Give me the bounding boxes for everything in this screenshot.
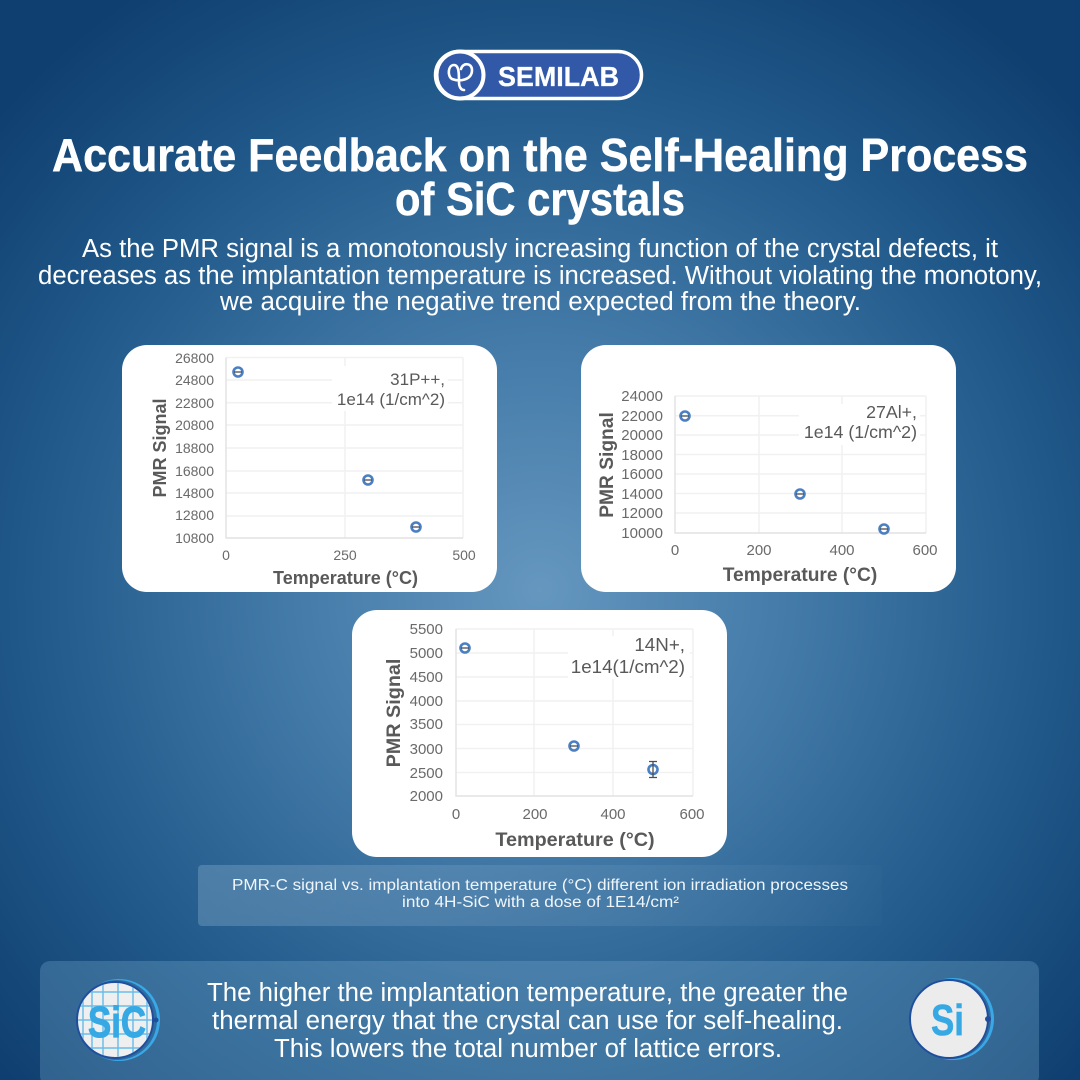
chart 2 x axis labels: 400 (829, 542, 855, 559)
chart 3 points (460, 644, 658, 778)
chart 2 y axis labels: 20000 (621, 427, 663, 444)
caption: into 4H-SiC with a dose of 1E14/cm² (402, 894, 679, 911)
chart 3 y axis labels: 5500 (410, 621, 443, 638)
chart 1 grid (226, 358, 463, 538)
chart 1 y axis labels: 24800 (175, 372, 214, 388)
chart 3 axis titles: PMR Signal (383, 659, 405, 767)
chart 2 grid (675, 396, 926, 533)
annotation background (568, 636, 690, 679)
chart 2 x axis labels: 200 (746, 542, 772, 559)
chart 2 y axis labels: 22000 (621, 408, 663, 425)
chart 2 x axis labels: 600 (912, 542, 938, 559)
chart 2 x axis labels (671, 542, 938, 559)
chart 1 annotation (337, 370, 445, 409)
panel: chart 14N+ (352, 610, 727, 857)
conclusion text: This lowers the total number of lattice errors. (274, 1035, 782, 1063)
chart 1 annotation: 31P++, (390, 370, 445, 389)
intro text: we acquire the negative trend expected from the theory. (219, 288, 861, 316)
chart 1 axis titles: PMR Signal (150, 398, 170, 498)
chart 3 x axis labels: 600 (679, 806, 705, 823)
title: of SiC crystals (395, 173, 685, 225)
chart 3 y axis labels (410, 621, 443, 805)
icon: SiC wafer (76, 979, 160, 1061)
chart 1 y axis labels: 20800 (175, 417, 214, 433)
title (52, 129, 1028, 225)
chart 2 y axis labels: 14000 (621, 486, 663, 503)
chart 3 grid (456, 629, 693, 796)
panel: conclusion (40, 961, 1039, 1080)
chart 1 axis titles (150, 398, 418, 588)
chart 1 y axis labels: 26800 (175, 350, 214, 366)
panel: chart 31P++ (122, 345, 497, 592)
intro text: As the PMR signal is a monotonously increasing function of the crystal defects, it (82, 235, 998, 263)
intro text: decreases as the implantation temperature is increased. Without violating the monotony, (38, 262, 1042, 290)
chart 2 y axis labels: 10000 (621, 525, 663, 542)
panel: chart 27Al+ (581, 345, 956, 592)
intro text (38, 235, 1042, 316)
chart 3 annotation (571, 634, 685, 677)
chart 2 x axis labels: 0 (671, 542, 679, 559)
chart 1 x axis labels: 500 (452, 547, 476, 563)
annotation background (799, 404, 920, 445)
conclusion text (207, 979, 848, 1063)
chart 1 y axis labels (175, 350, 214, 546)
chart 1 axis titles: Temperature (°C) (273, 568, 418, 588)
chart 1 x axis labels: 0 (222, 547, 230, 563)
chart 3 x axis labels: 200 (522, 806, 548, 823)
annotation background (332, 366, 448, 411)
chart 3 x axis labels: 400 (600, 806, 626, 823)
chart 1 y axis labels: 22800 (175, 395, 214, 411)
chart 2 annotation: 1e14 (1/cm^2) (804, 422, 917, 442)
chart 1 y axis labels: 16800 (175, 463, 214, 479)
logo: Semilab: SEMILAB (498, 61, 619, 92)
chart 1 points (234, 368, 420, 532)
chart 3 y axis labels: 2000 (410, 788, 443, 805)
chart 2 axis titles: Temperature (°C) (723, 565, 877, 586)
chart 1 x axis labels: 250 (333, 547, 357, 563)
chart 2 y axis labels (621, 388, 663, 542)
chart 1 y axis labels: 18800 (175, 440, 214, 456)
icon: Si wafer (910, 978, 994, 1060)
chart 3 y axis labels: 2500 (410, 765, 443, 782)
chart 3 y axis labels: 3000 (410, 741, 443, 758)
chart 2 y axis labels: 16000 (621, 466, 663, 483)
chart 1 annotation: 1e14 (1/cm^2) (337, 390, 445, 409)
chart 3 y axis labels: 4500 (410, 669, 443, 686)
conclusion text: The higher the implantation temperature, the greater the (207, 979, 848, 1007)
chart 3 x axis labels (452, 806, 705, 823)
chart 3 annotation: 1e14(1/cm^2) (571, 656, 685, 677)
chart 3 axis titles: Temperature (°C) (495, 829, 655, 851)
chart 2 y axis labels: 12000 (621, 505, 663, 522)
title: Accurate Feedback on the Self-Healing Process (52, 129, 1028, 181)
chart 2 axis titles: PMR Signal (597, 412, 618, 518)
chart 2 y axis labels: 18000 (621, 447, 663, 464)
chart 3 y axis labels: 4000 (410, 693, 443, 710)
chart 3 y axis labels: 5000 (410, 645, 443, 662)
chart 3 axis titles (383, 659, 655, 851)
chart 2 points (680, 412, 888, 534)
chart 3 annotation: 14N+, (634, 634, 685, 655)
caption: PMR-C signal vs. implantation temperature (°C) different ion irradiation processes (232, 877, 848, 894)
chart 3 y axis labels: 3500 (410, 716, 443, 733)
caption (198, 865, 882, 926)
chart 1 y axis labels: 14800 (175, 485, 214, 501)
chart 2 annotation: 27Al+, (866, 402, 917, 422)
chart 1 y axis labels: 10800 (175, 530, 214, 546)
chart 2 axis titles (597, 412, 877, 586)
chart 3 x axis labels: 0 (452, 806, 460, 823)
chart 1 y axis labels: 12800 (175, 507, 214, 523)
icon: SiC wafer: SiC (88, 998, 146, 1047)
chart 2 annotation (804, 402, 917, 442)
chart 2 y axis labels: 24000 (621, 388, 663, 405)
logo: Semilab (436, 52, 642, 98)
chart 1 x axis labels (222, 547, 476, 563)
conclusion text: thermal energy that the crystal can use for self-healing. (212, 1007, 843, 1035)
icon: Si wafer: Si (931, 996, 964, 1045)
